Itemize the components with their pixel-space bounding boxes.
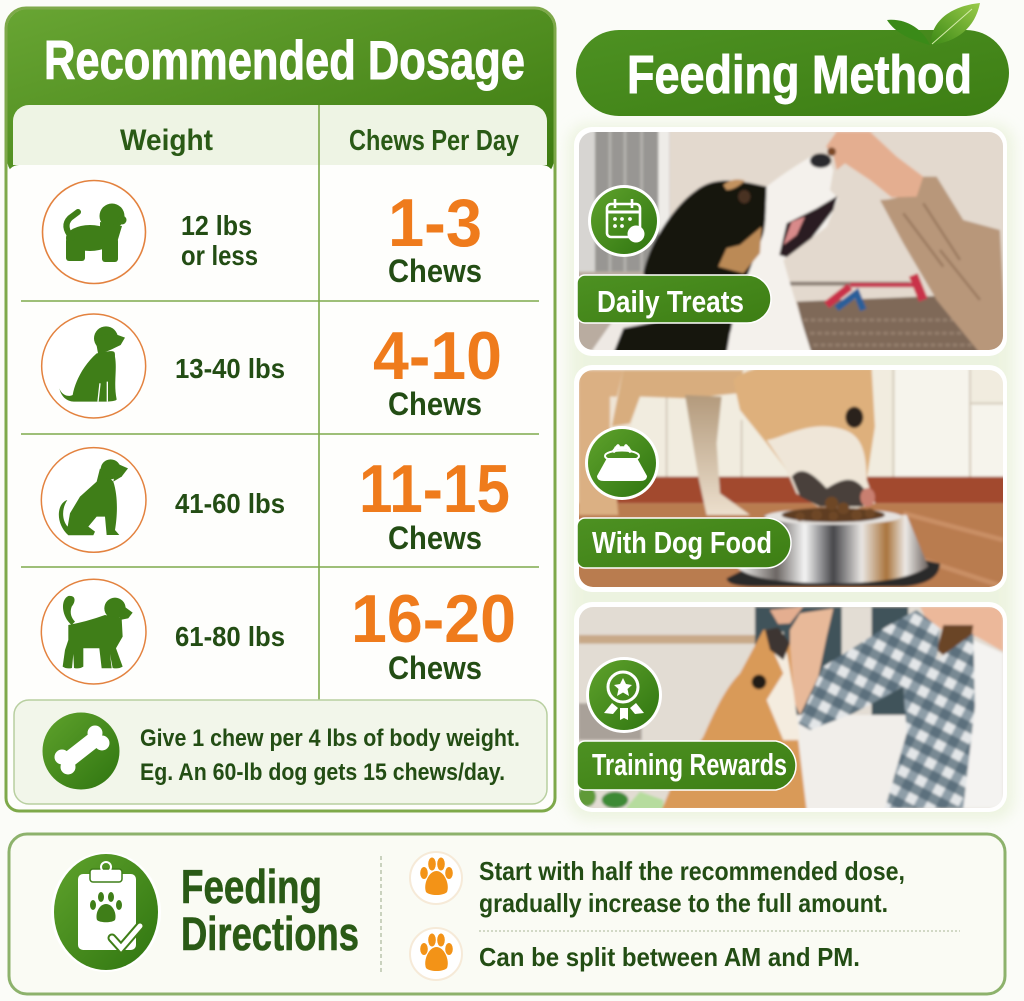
panel: with dog food photo xyxy=(570,365,1024,593)
column heading: weight: Weight xyxy=(120,124,213,157)
label: with dog food xyxy=(577,518,791,568)
direction text 1: gradually increase to the full amount. xyxy=(479,888,888,918)
dose number: 1-3 xyxy=(388,185,482,261)
panel: training rewards photo xyxy=(570,602,1024,812)
label: daily treats: Daily Treats xyxy=(597,284,744,319)
panel: feeding directions xyxy=(9,834,1005,994)
icon: award ribbon badge xyxy=(586,657,662,733)
dose unit: Chews xyxy=(388,650,482,686)
callout: dosing rule xyxy=(14,700,547,804)
dose number: 16-20 xyxy=(351,581,516,657)
direction text 1 xyxy=(479,856,905,918)
weight label: 61-80 lbs xyxy=(175,621,285,652)
icon: leaves xyxy=(887,3,980,45)
weight label: 12 lbs xyxy=(181,210,252,241)
icon: calendar badge xyxy=(588,185,660,257)
column heading: chews per day: Chews Per Day xyxy=(349,125,519,157)
label: training rewards xyxy=(577,741,796,790)
label: with dog food: With Dog Food xyxy=(592,525,772,560)
dose unit: Chews xyxy=(388,253,482,289)
callout line 1: Give 1 chew per 4 lbs of body weight. xyxy=(140,725,520,752)
photo: dog eating from bowl xyxy=(579,370,1003,587)
soft green glow behind photos xyxy=(568,124,1014,820)
table body xyxy=(7,165,554,810)
heading: feeding directions: Directions xyxy=(181,907,359,960)
label: training rewards: Training Rewards xyxy=(592,747,787,782)
row: 12 lbs or less xyxy=(42,180,482,289)
dose number: 4-10 xyxy=(373,318,502,394)
icon: bone xyxy=(42,712,120,790)
panel header band xyxy=(7,9,554,179)
dose unit: Chews xyxy=(388,386,482,422)
icon: clipboard badge xyxy=(51,852,161,972)
direction text 1: Start with half the recommended dose, xyxy=(479,856,905,886)
dose number: 11-15 xyxy=(359,451,510,527)
icon: bowl badge xyxy=(585,426,659,500)
panel outline xyxy=(6,8,555,811)
heading: feeding method xyxy=(576,3,1009,116)
dose unit: Chews xyxy=(388,520,482,556)
icon: medium sitting dog xyxy=(41,448,146,552)
panel: recommended dosage xyxy=(6,8,555,811)
direction text 2: Can be split between AM and PM. xyxy=(479,942,860,972)
weight label second line: or less xyxy=(181,240,258,271)
weight label: 41-60 lbs xyxy=(175,488,285,519)
icon: paw 2 xyxy=(410,928,462,980)
heading: feeding directions xyxy=(181,860,359,960)
weight label: 13-40 lbs xyxy=(175,353,285,384)
icon: tiny curly dog xyxy=(42,180,146,284)
icon: large standing dog xyxy=(41,579,146,684)
panel: daily treats photo xyxy=(570,127,1024,357)
title: recommended dosage: Recommended Dosage xyxy=(44,29,525,91)
row: 13-40 lbs xyxy=(42,314,502,422)
heading: feeding directions: Feeding xyxy=(181,860,322,913)
row: 41-60 lbs xyxy=(41,448,510,556)
icon: small sitting dog xyxy=(42,314,146,418)
icon: paw 1 xyxy=(410,852,462,904)
callout line 2: Eg. An 60-lb dog gets 15 chews/day. xyxy=(140,759,505,786)
label: daily treats xyxy=(577,275,771,323)
photo: dog taking treat xyxy=(579,132,1003,350)
row: 61-80 lbs xyxy=(41,579,516,686)
table header background xyxy=(13,105,547,165)
photo: dog and trainer xyxy=(570,605,1024,812)
